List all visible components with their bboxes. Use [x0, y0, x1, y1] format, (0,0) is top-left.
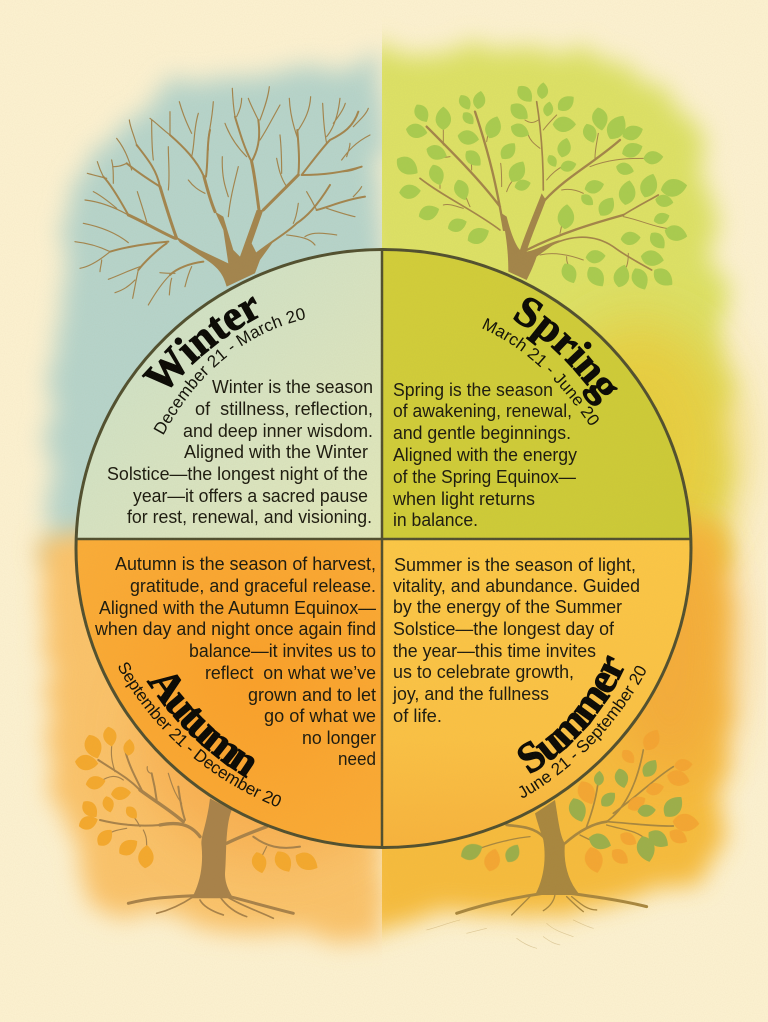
quadrant: autumn — [76, 539, 382, 849]
text: winter description: Solstice—the longest night of the — [107, 464, 368, 484]
text: winter description: for rest, renewal, and visioning. — [127, 507, 372, 527]
text: spring description: of awakening, renewal, — [393, 401, 572, 421]
heading: Autumn: Autumn — [146, 674, 254, 778]
text: autumn description: when day and night once again find — [94, 619, 376, 639]
text: winter description: of stillness, reflection, — [195, 399, 373, 419]
text: winter description: year—it offers a sacred pause — [133, 486, 368, 506]
date: September 21 - December 20: September 21 - December 20 — [118, 662, 281, 806]
quadrant: winter — [76, 250, 382, 539]
panel: winter — [74, 86, 381, 538]
text: spring description — [392, 380, 577, 530]
date: March 21 - June 20: March 21 - June 20 — [482, 318, 599, 425]
text: winter description — [107, 377, 373, 527]
text: autumn description: gratitude, and graceful release. — [130, 576, 376, 596]
tree: bare winter tree — [75, 87, 370, 305]
text: autumn description: balance—it invites us to — [189, 641, 376, 661]
heading: Summer: Summer — [518, 654, 624, 774]
tree: summer tree with green and orange leaves — [427, 726, 700, 948]
text: autumn description: Autumn is the season of harvest, — [115, 554, 376, 574]
text: autumn description: need — [338, 749, 376, 769]
text: autumn description: Aligned with the Autumn Equinox— — [99, 598, 376, 618]
date: December 21 - March 20: December 21 - March 20 — [154, 308, 305, 435]
text: summer description: vitality, and abundance. Guided — [393, 576, 640, 596]
text: summer description: the year—this time invites — [393, 641, 596, 661]
text: winter description: Aligned with the Winter — [184, 442, 368, 462]
tree: autumn tree with falling leaves — [74, 726, 322, 918]
panel: autumn — [75, 540, 381, 920]
text: spring description: Aligned with the energy — [393, 445, 577, 465]
text: autumn description — [94, 554, 376, 769]
text: summer description — [392, 555, 640, 726]
text: autumn description: no longer — [302, 728, 376, 748]
panel: summer — [384, 540, 700, 949]
text: spring description: in balance. — [393, 510, 478, 530]
quadrant: summer — [382, 539, 692, 849]
text: winter description: and deep inner wisdom. — [183, 421, 373, 441]
text: spring description: Spring is the season — [393, 380, 553, 400]
text: spring description: and gentle beginnings. — [393, 423, 571, 443]
heading: Winter: Winter — [142, 296, 259, 388]
text: summer description: Solstice—the longest day of — [393, 619, 615, 639]
text: summer description: by the energy of the Summer — [393, 597, 622, 617]
quadrant: spring — [382, 250, 692, 539]
text: spring description: when light returns — [392, 489, 535, 509]
circle outline and quadrant dividers — [76, 250, 691, 848]
tree: leafy spring tree — [392, 82, 689, 293]
heading: Spring: Spring — [513, 298, 618, 406]
text: autumn description: reflect on what we’ve — [205, 663, 376, 683]
watercolor washes — [40, 50, 735, 940]
text: summer description: us to celebrate growth, — [393, 662, 574, 682]
text: summer description: of life. — [393, 706, 442, 726]
text: winter description: Winter is the season — [212, 377, 373, 397]
text: summer description: joy, and the fullness — [392, 684, 549, 704]
panel: spring — [383, 82, 690, 538]
text: autumn description: go of what we — [264, 706, 376, 726]
date: June 21 - September 20: June 21 - September 20 — [519, 666, 646, 798]
text: spring description: of the Spring Equinox— — [393, 467, 576, 487]
text: summer description: Summer is the season of light, — [394, 555, 636, 575]
text: autumn description: grown and to let — [248, 685, 376, 705]
